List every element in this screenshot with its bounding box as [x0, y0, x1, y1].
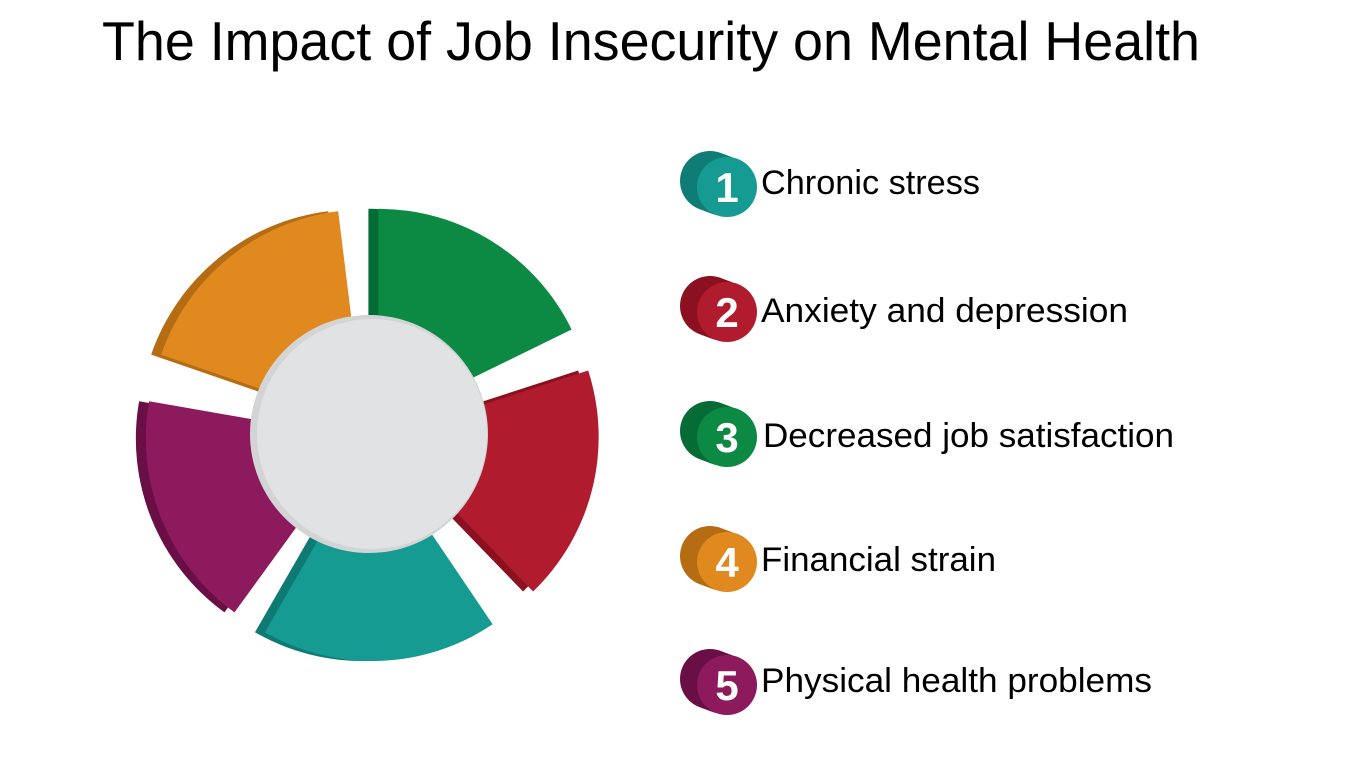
- badge 4: [680, 526, 757, 592]
- item 3: Decreased job satisfaction: [763, 417, 1174, 455]
- badge 5: 5: [715, 662, 739, 709]
- badge 2: 2: [715, 289, 739, 336]
- segment: teal: [227, 482, 493, 732]
- item 3: [680, 401, 1174, 467]
- badge 1: 1: [715, 164, 739, 211]
- badge 5: [680, 649, 757, 715]
- segment: red: [415, 370, 648, 607]
- donut chart: [68, 172, 648, 732]
- item 1: [680, 151, 980, 217]
- item 1: Chronic stress: [761, 164, 980, 202]
- item 4: [680, 526, 996, 592]
- badge 3: [680, 401, 757, 467]
- badge 2: [680, 276, 757, 342]
- item 2: Anxiety and depression: [761, 292, 1128, 330]
- center circle: [250, 315, 488, 553]
- title: The Impact of Job Insecurity on Mental Health: [102, 10, 1200, 72]
- item 5: [680, 649, 1152, 715]
- segment: orange: [151, 172, 386, 410]
- item 2: [680, 276, 1128, 342]
- badge 3: 3: [715, 414, 739, 461]
- item 4: Financial strain: [761, 541, 996, 579]
- segment: purple: [68, 360, 335, 612]
- badge 1: [680, 151, 757, 217]
- segment: green: [368, 209, 572, 380]
- badge 4: 4: [715, 539, 739, 586]
- item 5: Physical health problems: [761, 662, 1152, 700]
